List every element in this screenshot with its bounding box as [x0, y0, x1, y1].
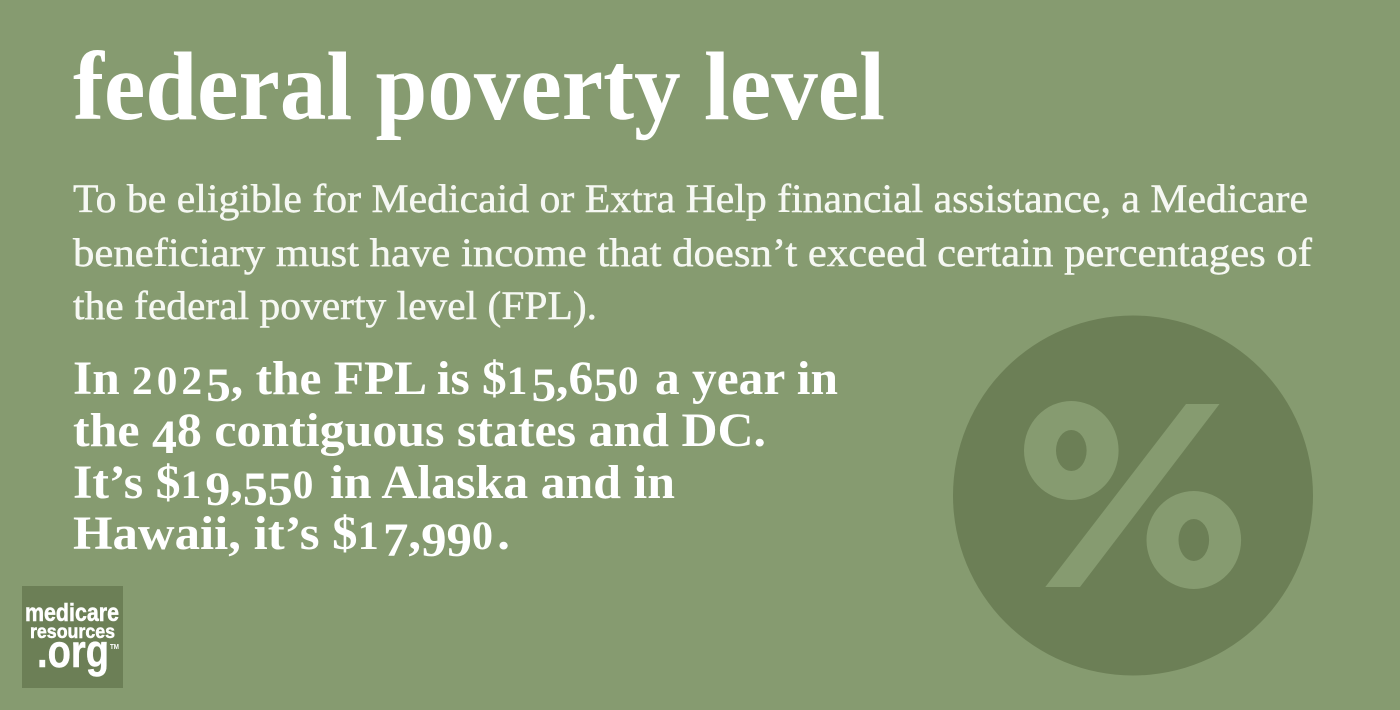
text block: 2025 FPL amounts: 4: [152, 411, 177, 464]
text block: eligibility explanation: [73, 176, 1313, 328]
text block: 2025 FPL amounts: the: [73, 404, 137, 457]
text block: 2025 FPL amounts: 5: [206, 359, 231, 412]
logo: medicareresources.org: resources: [30, 622, 115, 643]
text block: 2025 FPL amounts: [73, 352, 838, 567]
text block: 2025 FPL amounts: 5: [593, 359, 618, 412]
text block: 2025 FPL amounts: a year in: [655, 352, 832, 405]
text block: 2025 FPL amounts: , the FPL is $: [231, 352, 507, 405]
text block: eligibility explanation: the federal poverty level (FPL).: [73, 283, 597, 328]
text block: eligibility explanation: To be eligible for Medicaid or Extra Help financial assistance, a Medicare: [73, 176, 1308, 221]
text block: 2025 FPL amounts: It’s $1: [73, 456, 205, 509]
text block: eligibility explanation: beneficiary must have income that doesn’t exceed certain percentages of: [73, 230, 1313, 275]
text block: 2025 FPL amounts: ,: [408, 507, 421, 560]
text block: 2025 FPL amounts: 5: [531, 359, 556, 412]
text block: 2025 FPL amounts: 55: [243, 463, 293, 516]
text block: 2025 FPL amounts: 9: [205, 463, 230, 516]
logo: medicareresources.org: .org: [37, 625, 109, 677]
text block: 2025 FPL amounts: In 202: [73, 352, 204, 405]
logo: medicareresources.org: [22, 586, 123, 688]
text block: 2025 FPL amounts: 1: [507, 358, 531, 403]
title: federal poverty level: [73, 33, 885, 141]
icon: percent sign in circle: [953, 316, 1313, 676]
text block: 2025 FPL amounts: 0: [472, 513, 497, 558]
logo: medicareresources.org: medicare: [25, 599, 119, 627]
text block: 2025 FPL amounts: ,6: [556, 352, 593, 405]
text block: 2025 FPL amounts: 99: [421, 514, 472, 567]
text block: 2025 FPL amounts: .: [497, 507, 509, 560]
text block: 2025 FPL amounts: Hawaii, it’s $ 1: [73, 507, 382, 560]
text block: 2025 FPL amounts: 8 contiguous states and DC.: [177, 404, 766, 457]
text block: 2025 FPL amounts: 0: [293, 462, 318, 507]
text block: 2025 FPL amounts: 7: [383, 514, 408, 567]
text block: 2025 FPL amounts: ,: [230, 456, 243, 509]
text block: 2025 FPL amounts: 0: [618, 358, 643, 403]
text block: 2025 FPL amounts: in Alaska and in: [330, 456, 662, 509]
logo: medicareresources.org: TM: [110, 644, 119, 651]
